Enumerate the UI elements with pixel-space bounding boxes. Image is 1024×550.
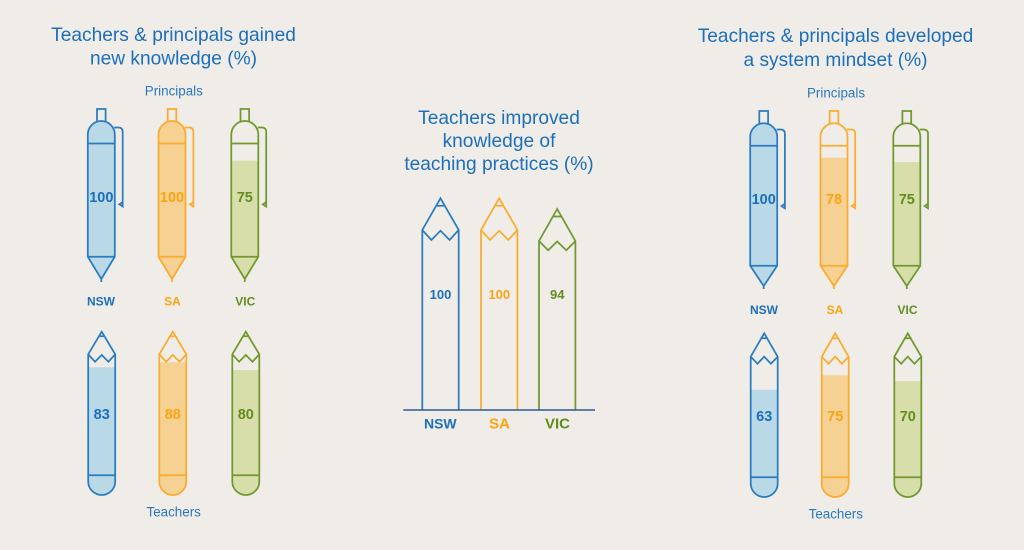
- heading: teaching practices: Teachers improved: [418, 108, 580, 129]
- pencil: NSW teachers 63: [751, 333, 778, 497]
- label: teachers: Teachers: [147, 504, 201, 520]
- pen: SA principals 78: [820, 111, 855, 289]
- pencil: VIC teachers 80: [232, 332, 259, 495]
- pencil: SA teachers 88: [159, 332, 186, 495]
- pencil: NSW 100: [422, 198, 459, 410]
- state label: VIC: VIC: [235, 294, 256, 308]
- heading: gained new knowledge: new knowledge (%): [90, 48, 257, 70]
- pen: NSW principals 100: 100: [89, 190, 113, 206]
- pen: NSW principals 100: 100: [752, 192, 776, 208]
- pencil: VIC teachers 70: 70: [900, 409, 916, 425]
- heading: gained new knowledge: Teachers & principals gained: [51, 25, 296, 46]
- state label: SA: SA: [164, 294, 181, 308]
- pencil: SA teachers 75: 75: [827, 409, 843, 425]
- label: teachers: Teachers: [809, 506, 863, 521]
- state label: NSW: NSW: [750, 303, 779, 317]
- label: principals: Principals: [145, 84, 203, 99]
- pencil: NSW teachers 83: [88, 332, 115, 495]
- heading: system mindset: Teachers & principals developed: [698, 26, 973, 47]
- pencil: VIC teachers 80: 80: [238, 407, 254, 423]
- heading: teaching practices: teaching practices (%): [404, 154, 594, 175]
- panel: improved knowledge of teaching practices: [403, 108, 595, 432]
- pen: NSW principals 100: [88, 109, 123, 282]
- pencil: SA teachers 88: 88: [165, 407, 181, 423]
- pencil: SA 100: [481, 198, 517, 410]
- pen: SA principals 100: [158, 109, 193, 282]
- panel: developed a system mindset: [698, 26, 973, 521]
- baseline: [403, 409, 595, 411]
- state label: NSW: NSW: [87, 294, 116, 308]
- label: principals: Principals: [807, 86, 865, 101]
- pen: NSW principals 100: [750, 111, 785, 289]
- pencil: SA 100: 100: [488, 287, 510, 302]
- pencil: VIC 94: [539, 209, 575, 410]
- pen: VIC principals 75: [893, 111, 928, 289]
- pencil: VIC 94: 94: [550, 287, 565, 302]
- state label: VIC: VIC: [545, 415, 570, 432]
- state label: NSW: NSW: [424, 415, 457, 431]
- heading: system mindset: a system mindset (%): [743, 50, 928, 71]
- pencil: NSW 100: 100: [430, 287, 451, 302]
- pencil: NSW teachers 63: 63: [756, 409, 772, 425]
- pen: SA principals 78: 78: [826, 192, 842, 208]
- state label: VIC: VIC: [897, 303, 918, 317]
- heading: teaching practices: knowledge of: [443, 131, 556, 152]
- pencil: NSW teachers 83: 83: [94, 407, 110, 423]
- pen: VIC principals 75: 75: [899, 192, 915, 208]
- pencil: VIC teachers 70: [894, 333, 921, 497]
- panel: gained new knowledge: [51, 25, 296, 520]
- pen: VIC principals 75: 75: [237, 190, 253, 206]
- pencil: SA teachers 75: [822, 333, 849, 497]
- pen: VIC principals 75: [231, 109, 266, 282]
- state label: SA: SA: [489, 415, 510, 432]
- state label: SA: SA: [827, 303, 844, 317]
- pen: SA principals 100: 100: [160, 190, 184, 206]
